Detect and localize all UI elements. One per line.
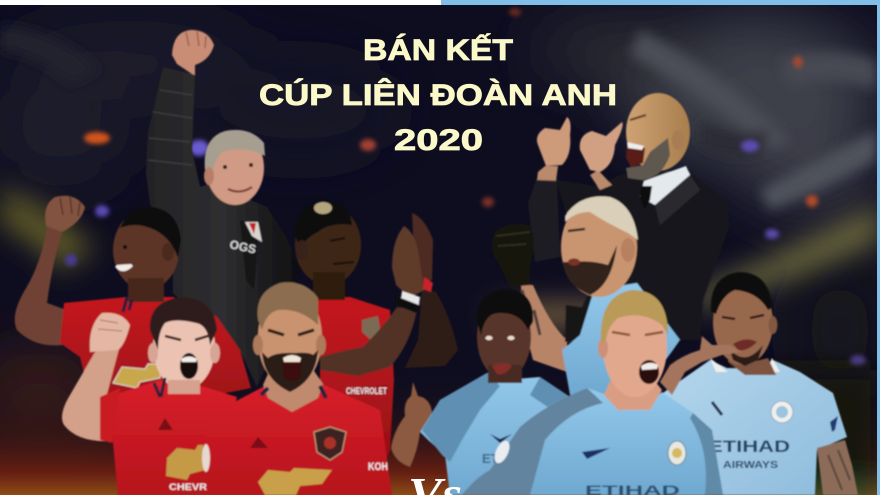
title (259, 33, 617, 157)
figure: player pointing, front left: ET (482, 451, 499, 466)
figure: manager in black jacket, arm raised: OGS (228, 237, 257, 256)
figure: player shouting, front centre: KOH (368, 461, 388, 473)
figure: player with phone gesture, front right (660, 272, 858, 495)
figure: player shouting, front centre (202, 282, 392, 495)
figure: player with raised fist, left back (15, 196, 251, 440)
figure: player with phone gesture, front right: AIRWAYS (723, 460, 778, 471)
title: CÚP LIÊN ĐOÀN ANH (259, 78, 617, 112)
top border: light blue (441, 0, 880, 5)
figure: player clapping, right back (294, 201, 458, 495)
top border: white (0, 0, 441, 5)
figure: player with raised fist, front left (62, 297, 237, 495)
right border: light blue (877, 0, 880, 495)
figure: player pointing, front left (391, 289, 570, 495)
player group: Manchester City (391, 93, 858, 495)
figure: player shouting, front centre (462, 290, 723, 495)
figure: player with raised fist, front left: CHEVR (169, 482, 208, 492)
figure: player clapping, right back: CHEVROLET (346, 386, 387, 396)
title: BÁN KẾT (363, 33, 513, 67)
player group: Manchester United (15, 30, 458, 495)
sponsor text on jersey: ETIHAD (708, 437, 790, 456)
figure: player with black glove, back (492, 196, 680, 395)
title: 2020 (394, 124, 483, 157)
figure: manager in black suit, thumbs up (528, 93, 729, 340)
figure: manager in black jacket, arm raised (146, 30, 300, 387)
